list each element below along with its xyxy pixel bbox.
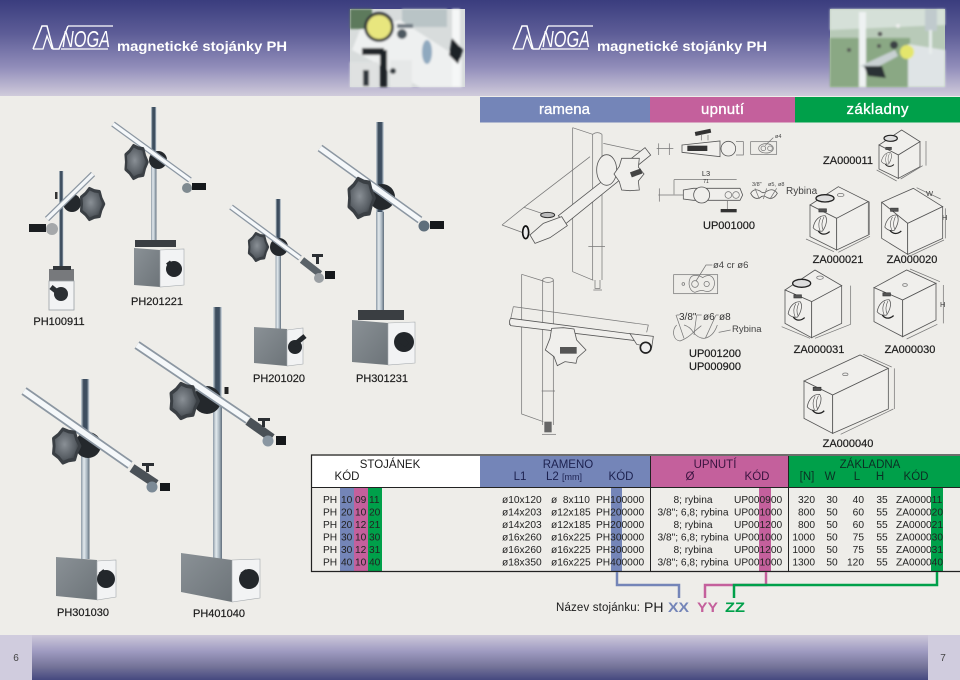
row 6: UP001000 [734, 558, 782, 568]
section tabs [480, 97, 960, 122]
row 3: 55 [876, 520, 888, 531]
row 2: ZA000020 [896, 508, 943, 518]
row 6: ø16x225 [551, 558, 591, 568]
base drawing ZA000030 [874, 269, 943, 339]
stand PH100911 [29, 171, 104, 310]
row 1: 40 [853, 495, 864, 506]
label: ZA000021: ZA000021 [813, 254, 863, 266]
row 5: 30 [341, 545, 353, 556]
row 1: UP000900 [734, 495, 782, 506]
label: Rybina lower: Rybina [732, 324, 762, 335]
row 5: ø16x225 [551, 545, 591, 556]
label: ø4 cr ø6: ø4 cr ø6 [713, 260, 748, 271]
stand name formula: YY [697, 599, 719, 615]
header band [0, 0, 960, 96]
label: PH301030: PH301030 [57, 607, 109, 619]
drawing: arm assembly upper [502, 128, 651, 290]
row 4: ø16x225 [551, 532, 591, 544]
stand PH401040 [137, 307, 286, 602]
row 3: 8; rybina [673, 520, 713, 531]
row 4: 1000 [792, 532, 815, 544]
drawing: clamp UP001200 holes [674, 265, 731, 341]
code colour stripes [340, 487, 943, 571]
row 6: 120 [847, 558, 864, 568]
table header text: KÓD [745, 470, 769, 483]
row 5: 12 [355, 545, 367, 556]
tab: základny: základny [846, 101, 909, 118]
row 6: 1300 [792, 558, 815, 568]
row 6: 55 [876, 558, 888, 568]
table header text: Ø [686, 471, 695, 483]
photo: dial gauge on stand [350, 9, 465, 87]
row 1 [323, 495, 943, 506]
row 6: 10 [355, 558, 367, 568]
row 5: UP001200 [734, 545, 782, 556]
page number 6: 6 [13, 653, 19, 664]
drawing: arm assembly lower [509, 274, 653, 434]
row 4: 55 [876, 532, 888, 544]
tab: ramena [480, 97, 650, 122]
row 3: ZA000021 [896, 520, 943, 531]
row 1: ø 8x110 [551, 495, 590, 506]
row 3: ø14x203 [502, 520, 542, 531]
label: ZA000030: ZA000030 [885, 344, 935, 356]
label: hole sizes [679, 312, 731, 323]
row 2: PH [323, 508, 337, 518]
base drawing ZA000011 [877, 130, 926, 181]
table header text: ZÁKLADNA [840, 458, 901, 471]
logo right: NOGA [542, 26, 590, 52]
row 1: 11 [369, 495, 380, 506]
row 6: ZA000040 [896, 558, 943, 568]
label: Rybina upper: Rybina [786, 186, 818, 197]
row 1: ø10x120 [502, 495, 542, 506]
row 5: 31 [369, 545, 381, 556]
footer band [0, 635, 960, 680]
row 6: 40 [341, 558, 353, 568]
label: small dimensions: ø5, [768, 182, 776, 188]
row 2: 60 [853, 508, 864, 518]
label: ZA000020: ZA000020 [887, 254, 937, 266]
row 4: PH300000 [596, 532, 644, 544]
row 4: 50 [826, 532, 838, 544]
row 4: ø16x260 [502, 532, 542, 544]
table header text: L [854, 471, 861, 483]
row 6: ø18x350 [502, 558, 542, 568]
row 1: ZA000011 [896, 495, 943, 506]
label: PH201221: PH201221 [131, 296, 183, 308]
row 1: PH [323, 495, 337, 506]
logo right [513, 26, 593, 52]
row 6: PH [323, 558, 337, 568]
label: UP001000: UP001000 [703, 220, 755, 232]
label: small dimensions: 3/8" [752, 182, 762, 188]
row 3: 21 [369, 520, 381, 531]
row 2: 800 [798, 508, 815, 518]
row 2: 50 [826, 508, 838, 518]
connector: arm code to XX [617, 572, 679, 598]
label: ZA000031: ZA000031 [794, 344, 844, 356]
table header text: UPNUTÍ [694, 458, 737, 471]
logo left [33, 26, 113, 52]
label: L3 and 71: 71 [703, 179, 709, 185]
label: UP001200: UP001200 [689, 348, 741, 360]
row 5: 55 [876, 545, 888, 556]
dimension H: H [942, 213, 947, 222]
base drawing ZA000031 [782, 270, 851, 338]
label: ZA000040: ZA000040 [823, 438, 873, 450]
drawing: clamp UP001000 [657, 129, 777, 212]
tab: upnutí [650, 97, 795, 122]
page number 7: 7 [940, 653, 946, 664]
row 5: 50 [826, 545, 838, 556]
label: PH401040: PH401040 [193, 608, 245, 620]
row 3: 800 [798, 520, 815, 531]
table header text: L1 [514, 471, 526, 483]
table header text: KÓD [904, 470, 928, 483]
table header text: H [876, 471, 884, 483]
row 2: ø14x203 [502, 508, 542, 518]
row 4: 10 [355, 532, 367, 544]
table header text: [N] [800, 471, 814, 483]
header title left: magnetické stojánky PH [117, 38, 287, 54]
stand name formula: PH [644, 599, 663, 615]
row 6: 40 [369, 558, 381, 568]
table rules [312, 455, 960, 572]
row 4 [323, 532, 943, 544]
base drawing ZA000021 [806, 187, 870, 252]
connector: base code to ZZ [734, 572, 937, 598]
table header text: KÓD [335, 470, 359, 483]
row 3: 12 [355, 520, 367, 531]
tab: základny [795, 97, 960, 122]
table header text: STOJÁNEK [360, 458, 421, 471]
row 1: 09 [355, 495, 367, 506]
row 5: 8; rybina [673, 545, 713, 556]
table header text: W [825, 471, 836, 483]
base drawing ZA000040 [804, 354, 894, 434]
row 5: 1000 [792, 545, 815, 556]
row 2: 20 [341, 508, 353, 518]
specification table [312, 455, 960, 572]
tab: upnutí: upnutí [701, 101, 745, 118]
row 5: ZA000031 [896, 545, 943, 556]
row 4: 75 [853, 532, 864, 544]
row 3: 60 [853, 520, 864, 531]
table header text: RAMENO [543, 459, 593, 471]
stand PH301030 [24, 379, 170, 600]
logo left: NOGA [62, 26, 110, 52]
row 4: 3/8"; 6,8; rybina [657, 532, 729, 544]
label: hole sizes: ø6 [703, 312, 715, 323]
row 4: PH [323, 532, 337, 544]
row 4: 30 [341, 532, 353, 544]
label: PH100911: PH100911 [33, 316, 85, 328]
table header text: L2 [mm] [546, 471, 582, 483]
row 2: ø12x185 [551, 508, 591, 518]
label: ZA000011: ZA000011 [823, 155, 873, 167]
label: small dimensions: ø8 [778, 182, 784, 188]
row 6: PH400000 [596, 558, 644, 568]
header title right: magnetické stojánky PH [597, 38, 767, 54]
row 5: PH [323, 545, 337, 556]
row 5: PH300000 [596, 545, 644, 556]
row 3: PH [323, 520, 337, 531]
stand name formula: ZZ [725, 599, 746, 615]
row 1: 35 [876, 495, 888, 506]
dimension W: W [926, 189, 934, 198]
row 3 [323, 520, 943, 531]
row 1: PH100000 [596, 495, 644, 506]
stand name formula: Název stojánku: [556, 602, 640, 614]
photo: dial gauge on green surface [830, 9, 945, 87]
label: UP000900: UP000900 [689, 361, 741, 373]
stand PH301231 [320, 122, 444, 365]
row 2: 20 [369, 508, 381, 518]
stand name formula [556, 599, 746, 615]
row 4: UP001000 [734, 532, 782, 544]
label: hole sizes: ø8 [719, 312, 731, 323]
label: small dimensions [752, 134, 784, 188]
table header fills [312, 456, 960, 487]
row 6: 3/8"; 6,8; rybina [657, 558, 729, 568]
table header text [335, 458, 928, 483]
row 1: 10 [341, 495, 353, 506]
row 3: UP001200 [734, 520, 782, 531]
tab: ramena: ramena [539, 101, 591, 118]
stand PH201020 [231, 199, 335, 366]
row 3: ø12x185 [551, 520, 591, 531]
row 1: 30 [826, 495, 838, 506]
row 5: 75 [853, 545, 864, 556]
label: hole sizes: 3/8" [679, 312, 697, 323]
stand PH201221 [113, 107, 206, 287]
row 4: ZA000030 [896, 532, 943, 544]
base drawing ZA000020 [882, 188, 945, 256]
row 2 [323, 508, 943, 518]
row 2: 3/8"; 6,8; rybina [657, 508, 729, 518]
row 2: 10 [355, 508, 367, 518]
label: small dimensions: ø4 [775, 134, 781, 140]
label: L3 and 71 [702, 169, 710, 185]
label: PH201020: PH201020 [253, 373, 305, 385]
row 1: 8; rybina [673, 495, 713, 506]
label: L3 and 71: L3 [702, 169, 710, 178]
stand name formula: XX [668, 599, 690, 615]
dimension letter H base: H [940, 300, 945, 309]
row 4: 30 [369, 532, 381, 544]
row 3: 20 [341, 520, 353, 531]
row 5 [323, 545, 943, 556]
row 3: PH200000 [596, 520, 644, 531]
label: PH301231: PH301231 [356, 373, 408, 385]
row 5: ø16x260 [502, 545, 542, 556]
row 3: 50 [826, 520, 838, 531]
table header text: KÓD [609, 470, 633, 483]
row 6: 50 [826, 558, 838, 568]
row 1: 320 [798, 495, 815, 506]
row 2: 55 [876, 508, 888, 518]
row 6 [323, 558, 943, 568]
row 2: UP001000 [734, 508, 782, 518]
connector: clamp code to YY [705, 572, 766, 598]
row 2: PH200000 [596, 508, 644, 518]
